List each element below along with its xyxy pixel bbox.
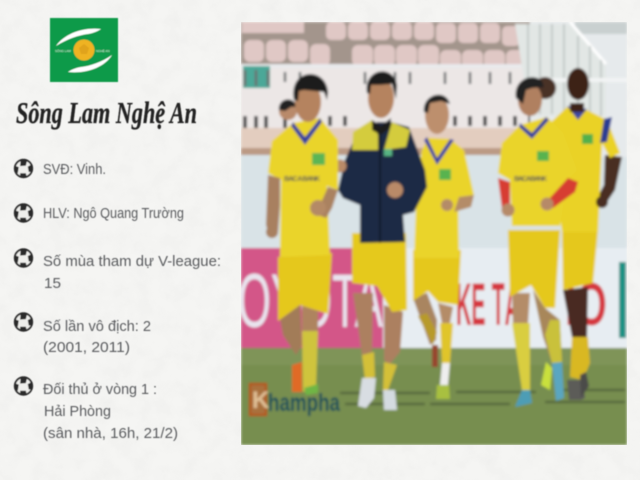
grass pitch: [241, 348, 627, 445]
advertising banner: [238, 248, 627, 350]
watermark: K: [252, 387, 270, 414]
advertising banner: OYOTA: [238, 259, 383, 344]
club logo: [50, 18, 118, 82]
advertising banner: IO: [565, 271, 607, 338]
club logo: SÔNG LAM: [55, 48, 71, 53]
player: centre right: [413, 95, 474, 399]
team photo: [238, 22, 627, 445]
title: Sông Lam Nghệ An: [16, 95, 197, 130]
watermark: [250, 384, 341, 417]
club logo: NGHỆ AN: [96, 48, 110, 53]
fact: stadium: [14, 159, 106, 178]
player: front right in red undersleeves: [498, 77, 578, 407]
fact: coach: HLV: Ngô Quang Trường: [43, 205, 184, 222]
fact: seasons: 15: [44, 275, 61, 292]
fact: round 1 opponent: Hải Phòng: [44, 403, 111, 420]
fact: titles: (2001, 2011): [43, 339, 130, 356]
fact: stadium: SVĐ: Vinh.: [43, 161, 106, 178]
fact list: [14, 159, 221, 442]
fact: titles: [14, 313, 151, 356]
advertising banner: KE TẢ: [456, 271, 520, 338]
small head behind player: [279, 99, 297, 120]
player: front left: BAC A BANK: [284, 176, 320, 183]
fact: seasons: Số mùa tham dự V-league:: [43, 253, 221, 270]
fact: round 1 opponent: Đối thủ ở vòng 1 :: [43, 381, 157, 398]
fact: round 1 opponent: [14, 377, 178, 442]
fact: titles: Số lần vô địch: 2: [43, 318, 151, 335]
stands: [241, 22, 532, 156]
watermark: hampha: [268, 389, 341, 417]
coach in navy jacket: [334, 71, 427, 410]
fact: round 1 opponent: (sân nhà, 16h, 21/2): [43, 425, 178, 442]
player: right forward: [534, 68, 622, 400]
player: front left: [266, 74, 338, 395]
back wall and railing: [241, 22, 627, 255]
player: front right in red undersleeves: BAC A BANK: [514, 176, 547, 183]
fact: coach: [14, 204, 184, 222]
fact: seasons: [14, 249, 221, 292]
